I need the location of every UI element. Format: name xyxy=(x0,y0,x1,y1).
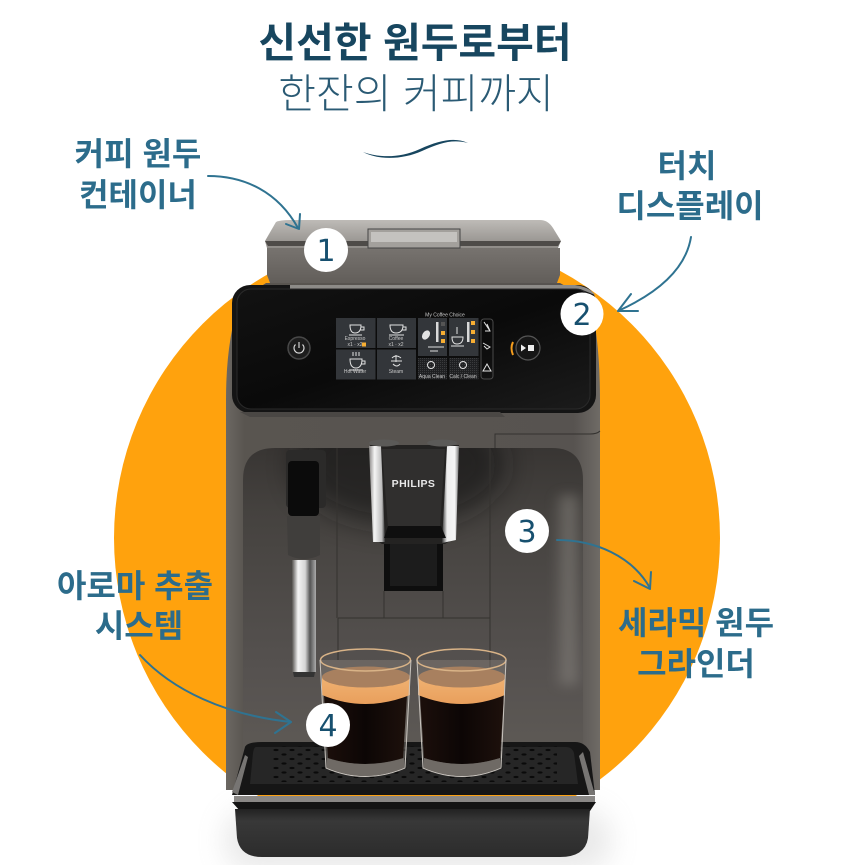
touch display: Hot Water xyxy=(344,369,366,375)
number badge 4: 4 xyxy=(318,709,338,744)
decorative wave xyxy=(363,140,468,158)
number badge 2: 2 xyxy=(572,298,592,333)
label: aroma extraction system: 시스템 xyxy=(95,608,183,644)
number badge 3: 3 xyxy=(517,515,537,550)
label: touch display: 터치 xyxy=(658,148,716,184)
machine body xyxy=(226,283,600,790)
number badge 1: 1 xyxy=(316,234,336,269)
steam wand xyxy=(286,450,326,677)
bean container xyxy=(265,220,561,296)
label: bean container xyxy=(75,136,201,213)
label: bean container: 컨테이너 xyxy=(79,177,197,213)
label: touch display xyxy=(616,148,764,224)
number badge 2 xyxy=(560,292,604,336)
number badge 3 xyxy=(505,509,549,553)
orange circle xyxy=(114,235,720,841)
title: 신선한 원두로부터 xyxy=(258,20,572,66)
label: touch display: 디스플레이 xyxy=(616,188,764,224)
touch display: Aqua Clean xyxy=(419,374,445,380)
philips logo: PHILIPS xyxy=(392,478,435,490)
coffee spout xyxy=(369,440,459,591)
bottom brew recess xyxy=(243,448,583,770)
label: bean container: 커피 원두 xyxy=(75,136,201,172)
touch display: x1 · x2 xyxy=(347,342,363,348)
control panel xyxy=(232,285,596,417)
arrow: bean container xyxy=(208,176,300,229)
arrow: ceramic grinder xyxy=(557,540,651,589)
label: aroma extraction system xyxy=(57,568,213,644)
label: ceramic bean grinder xyxy=(618,605,774,682)
touch display xyxy=(336,312,493,380)
power button xyxy=(288,337,310,359)
right glass of coffee xyxy=(417,649,506,776)
touch display: Calc / Clean xyxy=(449,374,477,380)
label: ceramic bean grinder: 그라인더 xyxy=(637,646,755,682)
label: ceramic bean grinder: 세라믹 원두 xyxy=(618,605,774,641)
left glass of coffee xyxy=(320,649,411,776)
touch display: My Coffee Choice xyxy=(425,312,465,318)
touch display: x1 · x2 xyxy=(388,342,404,348)
number badge 4 xyxy=(306,703,350,747)
arrow: aroma system xyxy=(140,655,291,733)
arrow: touch display xyxy=(618,237,691,311)
shading and brushed highlight in recess xyxy=(295,405,583,685)
touch display: Steam xyxy=(389,369,403,375)
touch display: Espresso xyxy=(345,336,366,342)
touch display: Coffee xyxy=(389,336,404,342)
label: aroma extraction system: 아로마 추출 xyxy=(57,568,213,604)
number badge 1 xyxy=(304,228,348,272)
subtitle: 한잔의 커피까지 xyxy=(278,71,554,117)
floor shadow xyxy=(225,810,610,865)
drip tray xyxy=(232,742,596,857)
coffee machine xyxy=(225,220,610,865)
start button xyxy=(512,336,540,360)
